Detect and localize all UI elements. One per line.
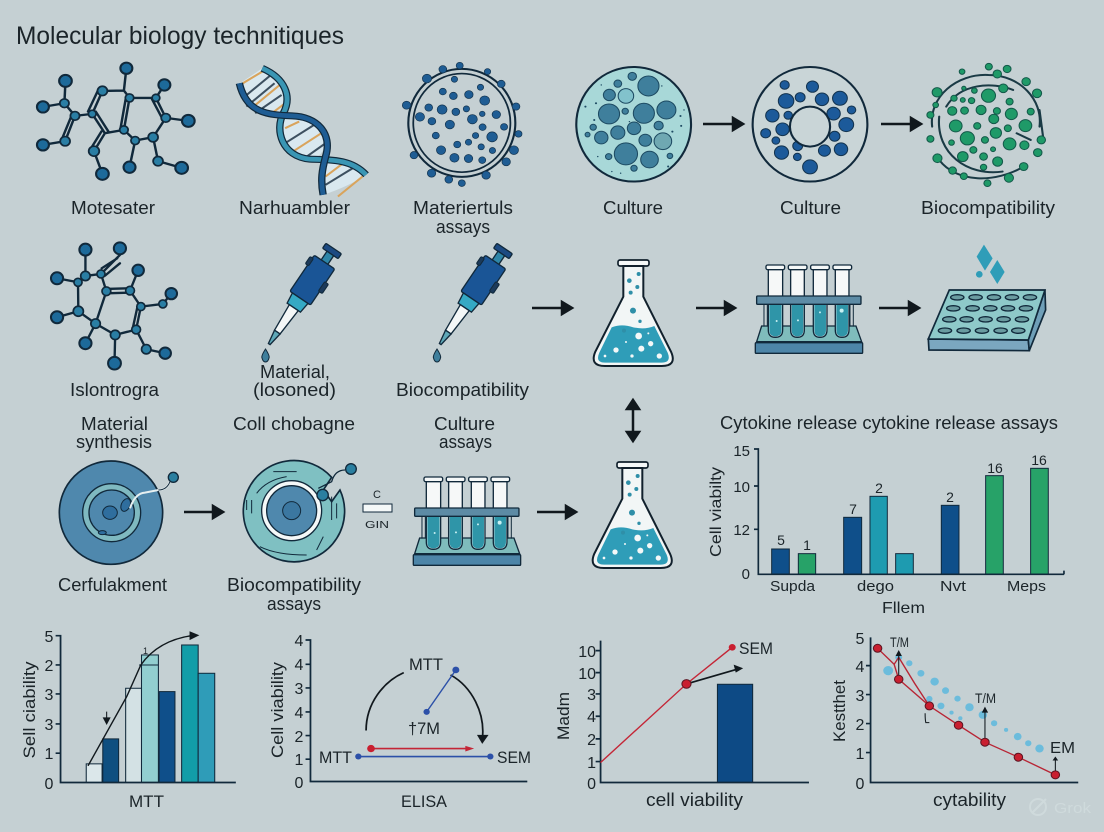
label: Biocompatibility assays	[227, 575, 361, 614]
bar chart: cytokine release	[708, 443, 1064, 617]
icon: culture dish blue	[753, 67, 867, 182]
y axis labels	[733, 443, 750, 583]
arrow: culture to culture	[703, 118, 743, 130]
y axis labels: 2	[587, 732, 596, 749]
chart heading: cytokine release: Cytokine release cytokine release assays	[720, 413, 1058, 433]
icon: cell 2	[243, 461, 356, 562]
icon: flask 1	[594, 260, 673, 366]
y axis labels	[295, 633, 304, 792]
icon: flask 2	[593, 462, 672, 568]
bar values: 16	[987, 460, 1003, 476]
y axis labels	[578, 644, 596, 793]
inline labels: MTT	[319, 748, 352, 767]
watermark: Grok	[1054, 800, 1092, 817]
y axis labels: 5	[856, 631, 865, 648]
y axis labels: 3	[856, 688, 865, 705]
icon: material particle	[402, 62, 522, 186]
mini fraction label	[363, 489, 392, 531]
label: Materiertuls assays: Materiertuls	[413, 198, 513, 218]
bar values: 2	[875, 480, 883, 496]
category labels: Nvt	[940, 578, 967, 595]
y axis labels: 2	[45, 658, 54, 675]
arrow: flask to rack	[696, 302, 735, 314]
label: Cerfulakment: Cerfulakment	[58, 575, 167, 595]
y axis title: Kestthet	[830, 680, 849, 742]
label: Motesater: Motesater	[71, 198, 155, 218]
inline labels: T/M	[890, 634, 909, 650]
y axis labels: 2	[856, 717, 865, 734]
y axis labels: 10	[733, 479, 750, 496]
label: Culture assays	[434, 414, 495, 452]
icon: test tube rack 1	[755, 265, 863, 353]
inline labels	[890, 634, 1075, 810]
y axis labels: 5	[45, 629, 54, 646]
y axis title: Cell viabilty	[708, 467, 725, 557]
inline labels: EM	[1050, 740, 1075, 757]
icon: molecule 1	[37, 63, 195, 180]
y axis labels: 4	[295, 705, 304, 722]
y axis labels: 1	[856, 746, 865, 763]
category labels: Supda	[770, 578, 816, 595]
x axis title: MTT	[129, 792, 164, 811]
y axis title: Sell ciability	[20, 661, 39, 758]
bar values: 5	[777, 532, 785, 548]
label: Material (losoned): Material,	[260, 362, 330, 382]
label: Biocompatibility row 2: Biocompatibility	[396, 380, 529, 400]
icon: molecule 2	[51, 242, 177, 370]
chart: declining curves	[830, 631, 1078, 810]
label: Biocompatibility assays: assays	[267, 594, 321, 614]
inline labels: †7M	[408, 719, 440, 738]
bar values: 2	[946, 489, 954, 505]
label: Islontrogra: Islontrogra	[70, 380, 160, 400]
label: Culture assays: Culture	[434, 414, 495, 434]
icon: well plate	[928, 245, 1046, 351]
y axis labels: 3	[45, 717, 54, 734]
y axis labels: 10	[578, 644, 596, 661]
arrow: culture to biocompatibility	[881, 118, 921, 130]
y axis labels: 0	[587, 776, 596, 793]
y axis labels: 0	[742, 566, 750, 583]
icon: pipette 2	[428, 240, 518, 362]
icon: culture dish teal	[576, 67, 691, 182]
category labels: Fllem	[882, 600, 925, 617]
y axis labels: 10	[578, 666, 596, 683]
inline labels: SEM	[497, 748, 531, 767]
label: Material (losoned)	[253, 362, 336, 400]
y axis labels: 4	[587, 709, 596, 726]
label: Materiertuls assays	[413, 198, 513, 237]
y axis labels: 15	[733, 443, 750, 460]
category labels: dego	[857, 578, 894, 595]
y axis labels: 2	[295, 729, 304, 746]
label: Culture 2: Culture	[780, 198, 841, 218]
mini fraction label: GIN	[365, 520, 389, 531]
inline labels: ELISA	[401, 792, 448, 811]
inline labels: T/M	[975, 690, 996, 706]
chart: ELISA	[268, 633, 531, 811]
arrow: to flask	[532, 302, 572, 314]
label: Biocompatibility top: Biocompatibility	[921, 198, 1055, 218]
label: Culture 1: Culture	[603, 198, 663, 218]
y axis labels: 3	[295, 681, 304, 698]
watermark	[1030, 799, 1092, 817]
mini fraction label: C	[373, 489, 381, 501]
y axis labels: 3	[587, 687, 596, 704]
label: Material (losoned): (losoned)	[253, 380, 336, 400]
y axis labels: 4	[295, 633, 304, 650]
bar values: 7	[849, 501, 857, 517]
chart: cell viability line and bar	[554, 639, 809, 810]
y axis labels	[856, 631, 865, 793]
label: Narhuambler: Narhuambler	[239, 198, 350, 218]
arrow: cell to cell	[184, 506, 223, 518]
y axis labels: 1	[587, 755, 596, 772]
bar values: 1	[803, 537, 811, 553]
y axis labels: 0	[295, 775, 304, 792]
icon: green particle	[927, 63, 1046, 187]
y axis title: Madm	[554, 692, 573, 740]
x axis title: cell viability	[646, 790, 743, 810]
label: Material synthesis	[76, 414, 152, 452]
label: Coll chobagne: Coll chobagne	[233, 414, 355, 434]
label: Materiertuls assays: assays	[436, 217, 490, 237]
arrow: rack to flask	[537, 506, 576, 518]
bar values: 16	[1031, 452, 1047, 468]
y axis labels: 0	[856, 776, 865, 793]
icon: DNA helix	[239, 68, 366, 196]
label: Material synthesis: Material	[81, 414, 148, 434]
category labels: Meps	[1007, 578, 1046, 595]
y axis labels: 1	[295, 752, 304, 769]
y axis labels	[45, 629, 54, 793]
inline labels: cytability	[933, 790, 1006, 810]
chart: bars MTT: 1	[143, 646, 148, 656]
y axis title: Cell viability	[268, 661, 287, 758]
category labels	[770, 578, 1046, 617]
arrow: double vertical	[627, 400, 639, 441]
inline labels	[319, 655, 531, 811]
label: Biocompatibility assays: Biocompatibility	[227, 575, 361, 595]
y axis labels: 3	[45, 687, 54, 704]
icon: cell 1	[59, 461, 178, 564]
title: Molecular biology technitiques	[16, 22, 344, 50]
icon: pipette 1	[257, 240, 347, 362]
inline labels: MTT	[409, 655, 443, 674]
chart: cell viability line and bar: SEM	[739, 639, 773, 658]
label: Material synthesis: synthesis	[76, 432, 152, 452]
icon: test tube rack 2	[413, 477, 521, 565]
bar values	[777, 452, 1047, 553]
y axis labels: 12	[733, 522, 750, 539]
y axis labels: 4	[295, 657, 304, 674]
label: Culture assays: assays	[439, 432, 492, 452]
arrow: rack to plate	[879, 302, 919, 314]
y axis labels: 4	[856, 659, 865, 676]
y axis labels: 0	[45, 776, 54, 793]
y axis labels: 1	[45, 746, 54, 763]
chart: bars MTT	[20, 629, 236, 811]
